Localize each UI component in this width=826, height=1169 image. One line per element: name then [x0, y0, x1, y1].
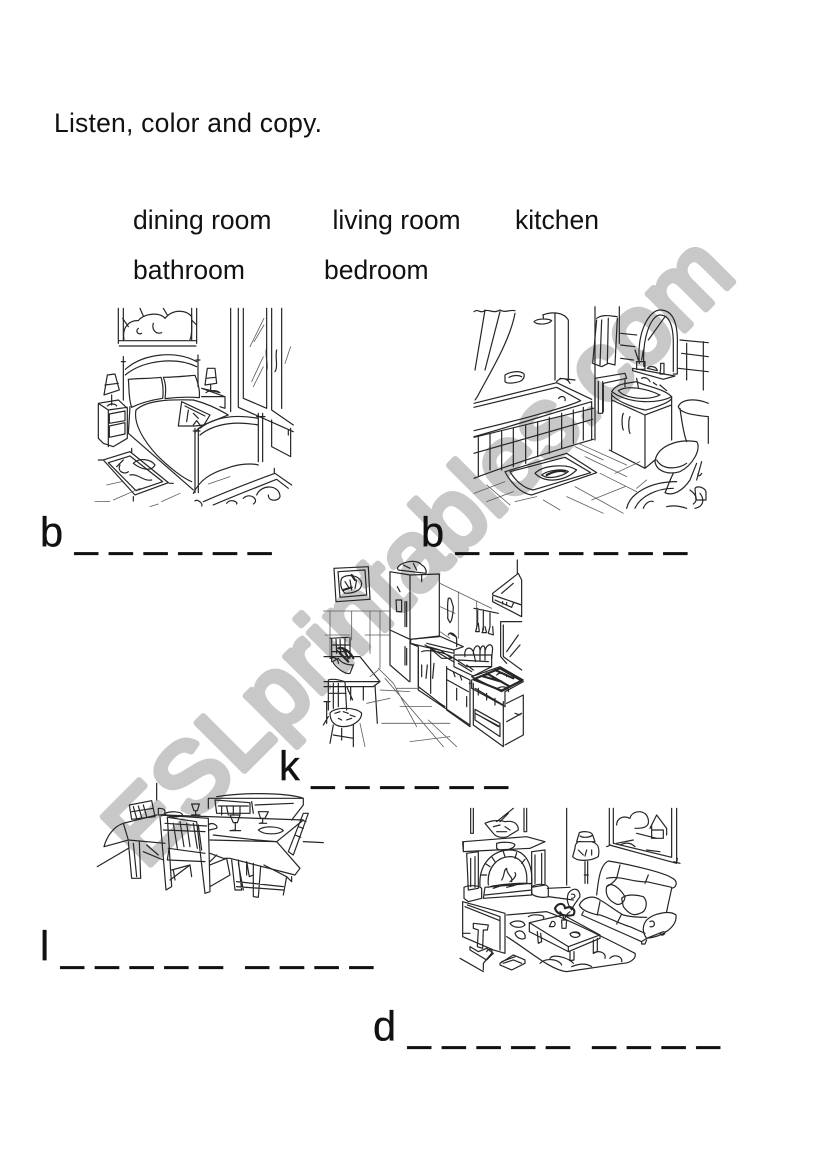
- instruction heading: Listen, color and copy.: [54, 108, 322, 138]
- icon: sofa: [567, 861, 676, 944]
- illustration: bathroom: [474, 307, 708, 513]
- word bank: bathroom: [133, 255, 245, 285]
- word bank: kitchen: [515, 205, 599, 235]
- answer line: bathroom: b _ _ _ _ _ _ _: [421, 508, 688, 556]
- word bank: bedroom: [324, 255, 429, 285]
- illustration: bedroom: [95, 308, 293, 507]
- answer line: bedroom: b _ _ _ _ _ _: [40, 508, 272, 556]
- answer line: kitchen: k _ _ _ _ _ _: [279, 742, 509, 790]
- illustration: living room: [460, 808, 680, 972]
- watermark: ESLprintables.com: [82, 215, 752, 885]
- illustration: kitchen: [323, 560, 523, 747]
- answer line: living room: d _ _ _ _ _ _ _ _ _: [373, 1002, 721, 1050]
- word bank: dining room: [133, 205, 271, 235]
- answer line: dining room: l _ _ _ _ _ _ _ _ _: [40, 922, 374, 970]
- illustration: dining room: [97, 783, 323, 897]
- word bank: living room: [332, 205, 461, 235]
- word bank: [133, 205, 599, 285]
